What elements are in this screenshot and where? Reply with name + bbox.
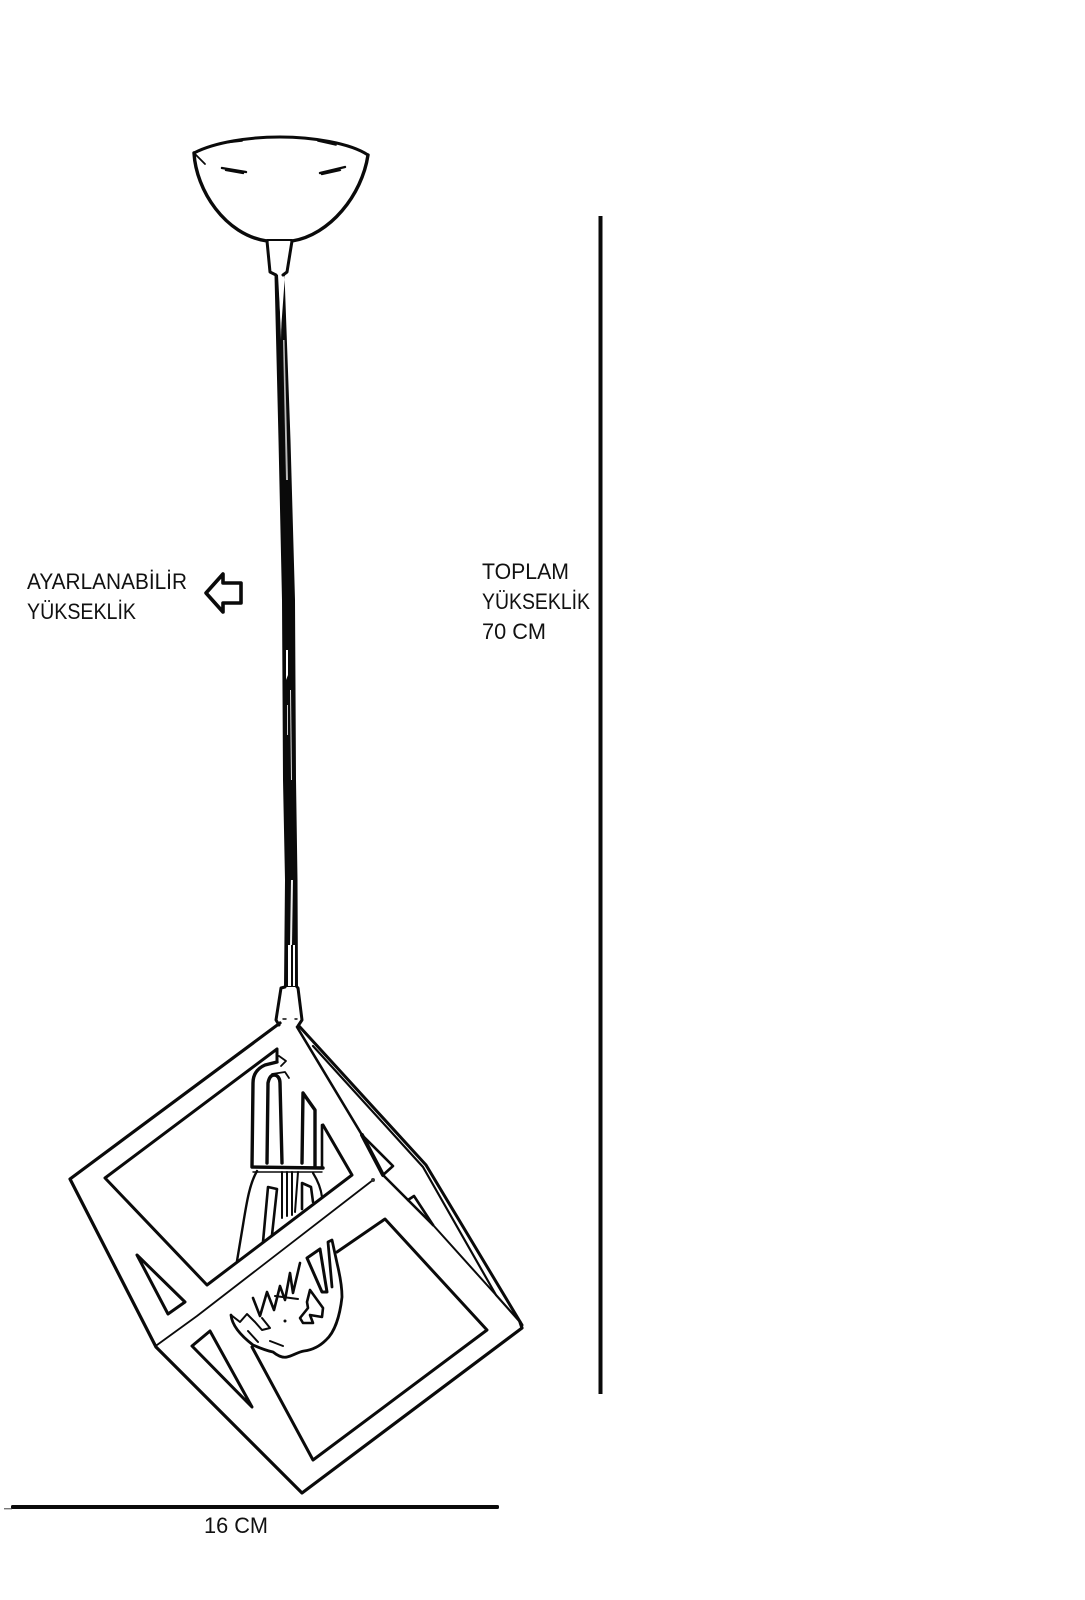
label: total height: TOPLAM	[482, 559, 569, 584]
label: width: 16 CM	[204, 1513, 268, 1538]
dimension line: total height	[598, 216, 602, 1394]
lower triangle cutout	[192, 1331, 252, 1407]
icon: bulb lower glass	[231, 1240, 342, 1357]
icon: cord collar	[276, 987, 302, 1026]
lower window	[252, 1219, 487, 1460]
label: total height	[482, 559, 590, 644]
icon: bulb socket	[252, 1056, 323, 1172]
label: adjustable height: AYARLANABİLİR	[27, 569, 187, 594]
label: total height: YÜKSEKLİK	[482, 589, 590, 614]
right side edges	[297, 1027, 362, 1135]
label: adjustable height	[27, 569, 187, 624]
icon: ceiling canopy	[194, 137, 368, 275]
diagonal edge	[157, 1180, 373, 1345]
icon: adjustable cord	[274, 275, 298, 987]
arrow: adjustable height pointer	[206, 574, 241, 612]
label: total height: 70 CM	[482, 619, 546, 644]
cube front outline	[70, 1023, 522, 1493]
upper window	[105, 1049, 352, 1285]
label: adjustable height: YÜKSEKLİK	[27, 599, 136, 624]
left triangle cutout	[137, 1255, 185, 1314]
icon: bulb upper glass	[237, 1171, 322, 1261]
icon: cube lamp shade	[70, 1023, 522, 1493]
dimension line: width	[4, 1505, 499, 1509]
